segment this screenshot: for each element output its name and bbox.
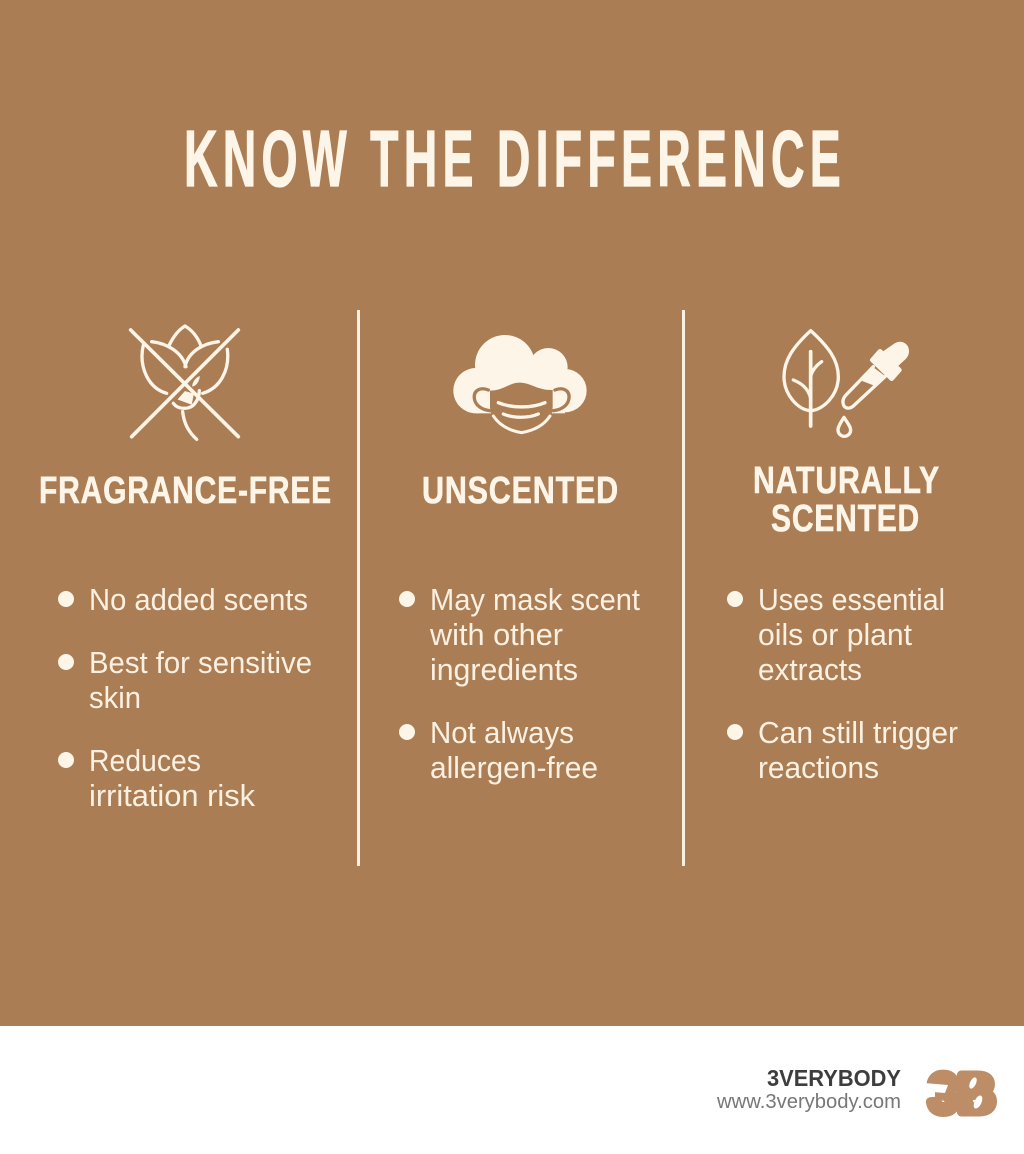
bullet: not always allergen-free: Not always: [430, 715, 574, 750]
logo: 3B: 3B: [929, 1064, 995, 1124]
heading: naturally scented: NATURALLY: [753, 460, 940, 502]
bullet: not always allergen-free: allergen-free: [430, 750, 598, 785]
bullet: uses essential oils: oils or plant: [758, 617, 912, 652]
bullet: best for sensitive skin: [58, 645, 312, 715]
panel: naturally scented: [727, 331, 958, 785]
bullet: may mask scent: ingredients: [430, 652, 578, 687]
icon: leaf and dropper: [784, 331, 908, 436]
bullet: reduces irritation risk: Reduces: [89, 743, 201, 778]
heading: naturally scented: [753, 460, 940, 540]
bullet: best for sensitive skin: Best for sensitive: [89, 645, 312, 680]
footer brand name: 3VERYBODY: [767, 1065, 901, 1091]
bullet: can still trigger reactions: reactions: [758, 750, 879, 785]
bullet: best for sensitive skin: skin: [89, 680, 141, 715]
bullet: no added scents: No added scents: [89, 582, 308, 617]
bullet: uses essential oils: extracts: [758, 652, 862, 687]
bullet: can still trigger reactions: Can still trigger: [758, 715, 958, 750]
panel: fragrance-free: [39, 326, 332, 813]
footer url: www.3verybody.com: [716, 1091, 901, 1113]
bullet: reduces irritation risk: irritation risk: [89, 778, 255, 813]
heading: naturally scented: SCENTED: [771, 498, 920, 540]
icon: cloud with face mask: [453, 335, 587, 438]
heading: unscented: UNSCENTED: [422, 470, 619, 512]
icon: crossed-out flower: [131, 326, 238, 439]
bullet: reduces irritation risk: [58, 743, 255, 813]
panel: unscented: [399, 335, 640, 785]
bullet: uses essential oils: [727, 582, 945, 687]
bullet: may mask scent: with other: [429, 617, 563, 652]
bullet: not always allergen-free: [399, 715, 598, 785]
bullet: may mask scent: May mask scent: [430, 582, 640, 617]
bullet: can still trigger reactions: [727, 715, 958, 785]
white footer band: [0, 1026, 1024, 1154]
heading: fragrance-free: FRAGRANCE-FREE: [39, 470, 332, 512]
bullet: may mask scent: [399, 582, 640, 687]
bullet: uses essential oils: Uses essential: [758, 582, 945, 617]
